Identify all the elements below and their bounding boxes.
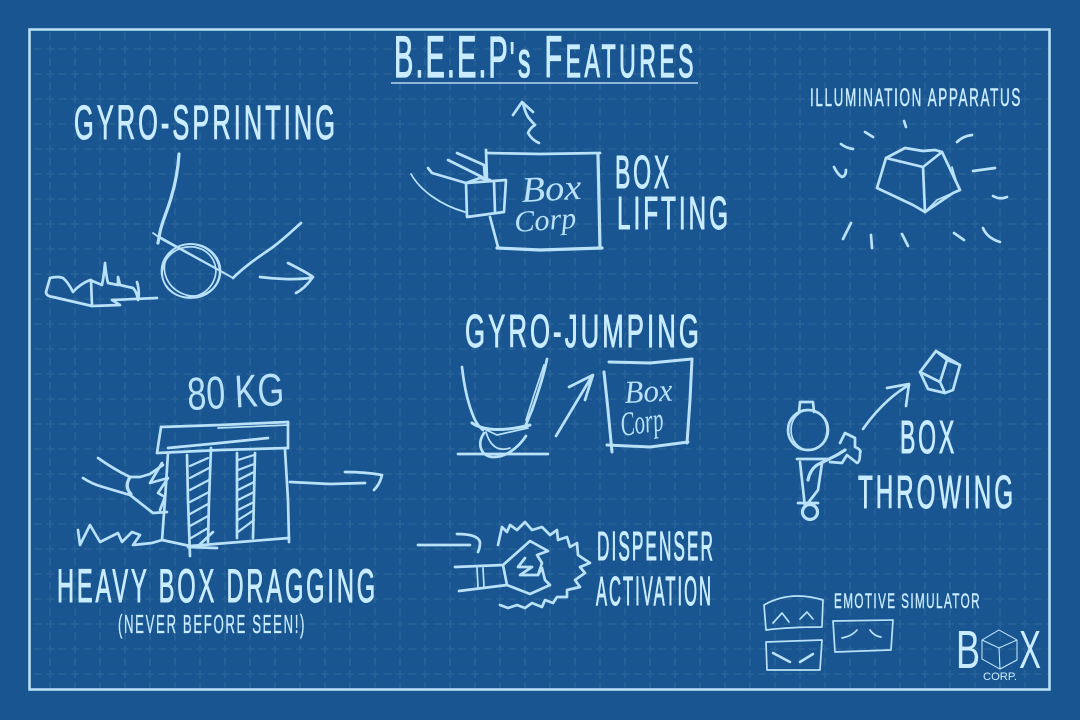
handwritten logo on target box: Box bbox=[623, 372, 673, 410]
logo: box corp: CORP. bbox=[983, 671, 1017, 683]
heading: gyro-sprinting: GYRO-SPRINTING bbox=[74, 97, 338, 150]
heading: heavy box dragging: HEAVY BOX DRAGGING bbox=[57, 559, 378, 612]
label: box throwing: BOX bbox=[900, 411, 957, 463]
handwritten logo on box bbox=[513, 167, 582, 239]
sketch: motion arrow bbox=[418, 534, 480, 552]
logo: box corp: X bbox=[1019, 620, 1041, 680]
sketch: diagonal arrow bbox=[556, 375, 593, 436]
panel: gyro-sprinting bbox=[46, 97, 338, 306]
icon: sad eyes screen bbox=[833, 620, 893, 652]
sketch: impact burst bbox=[498, 522, 590, 608]
icon: happy eyes screen bbox=[764, 596, 823, 630]
sketch: fist bbox=[455, 541, 550, 594]
sketch: throw arrow bbox=[863, 384, 909, 429]
sketch: light rays bbox=[834, 121, 1007, 248]
handwritten weight label: 80 KG bbox=[186, 363, 285, 420]
handwritten logo on target box: Corp bbox=[618, 401, 666, 444]
sketch: glowing cube bbox=[877, 148, 960, 212]
sketch: pull arrow bbox=[290, 472, 382, 490]
panel: box throwing bbox=[788, 351, 1016, 520]
panel: illumination apparatus bbox=[810, 84, 1022, 248]
sketch: hand gripping box bbox=[83, 458, 168, 513]
sketch: heavy box bbox=[157, 422, 289, 556]
label: box lifting: LIFTING bbox=[617, 187, 731, 239]
label: dispenser activation bbox=[596, 523, 715, 614]
handwritten logo on box: Box bbox=[520, 167, 582, 210]
subheading: (NEVER BEFORE SEEN!) bbox=[118, 609, 306, 639]
label: box lifting bbox=[615, 146, 731, 239]
sketch: upward arrow bbox=[513, 102, 539, 143]
label: box throwing bbox=[858, 411, 1016, 518]
sketch: gyro wheel sprinting bbox=[46, 154, 313, 306]
logo: box corp bbox=[956, 620, 1041, 683]
sketch: ground scuff bbox=[78, 525, 162, 545]
label: box lifting: BOX bbox=[615, 146, 672, 198]
logo: box corp: B bbox=[956, 620, 980, 680]
title: B.E.E.P's FEATURES bbox=[394, 25, 697, 90]
panel: dispenser activation bbox=[418, 522, 715, 614]
sketch: gyro wheel jumping bbox=[458, 359, 548, 457]
icon: angry eyes screen bbox=[766, 640, 822, 670]
text: ACTIVATION bbox=[596, 568, 713, 614]
panel: box lifting bbox=[411, 102, 731, 250]
sketch: target box bbox=[604, 359, 692, 452]
sketch: robot throwing bbox=[788, 402, 860, 520]
panel: gyro-jumping bbox=[458, 305, 702, 457]
sketch: thrown cube bbox=[920, 351, 960, 393]
panel: emotive simulator bbox=[764, 590, 981, 670]
sketch: box held by claw bbox=[411, 150, 602, 250]
heading: gyro-jumping: GYRO-JUMPING bbox=[465, 305, 702, 357]
handwritten logo on target box bbox=[618, 372, 673, 444]
handwritten logo on box: Corp bbox=[513, 202, 577, 239]
text: DISPENSER bbox=[597, 523, 715, 569]
panel: heavy box dragging bbox=[57, 363, 382, 639]
